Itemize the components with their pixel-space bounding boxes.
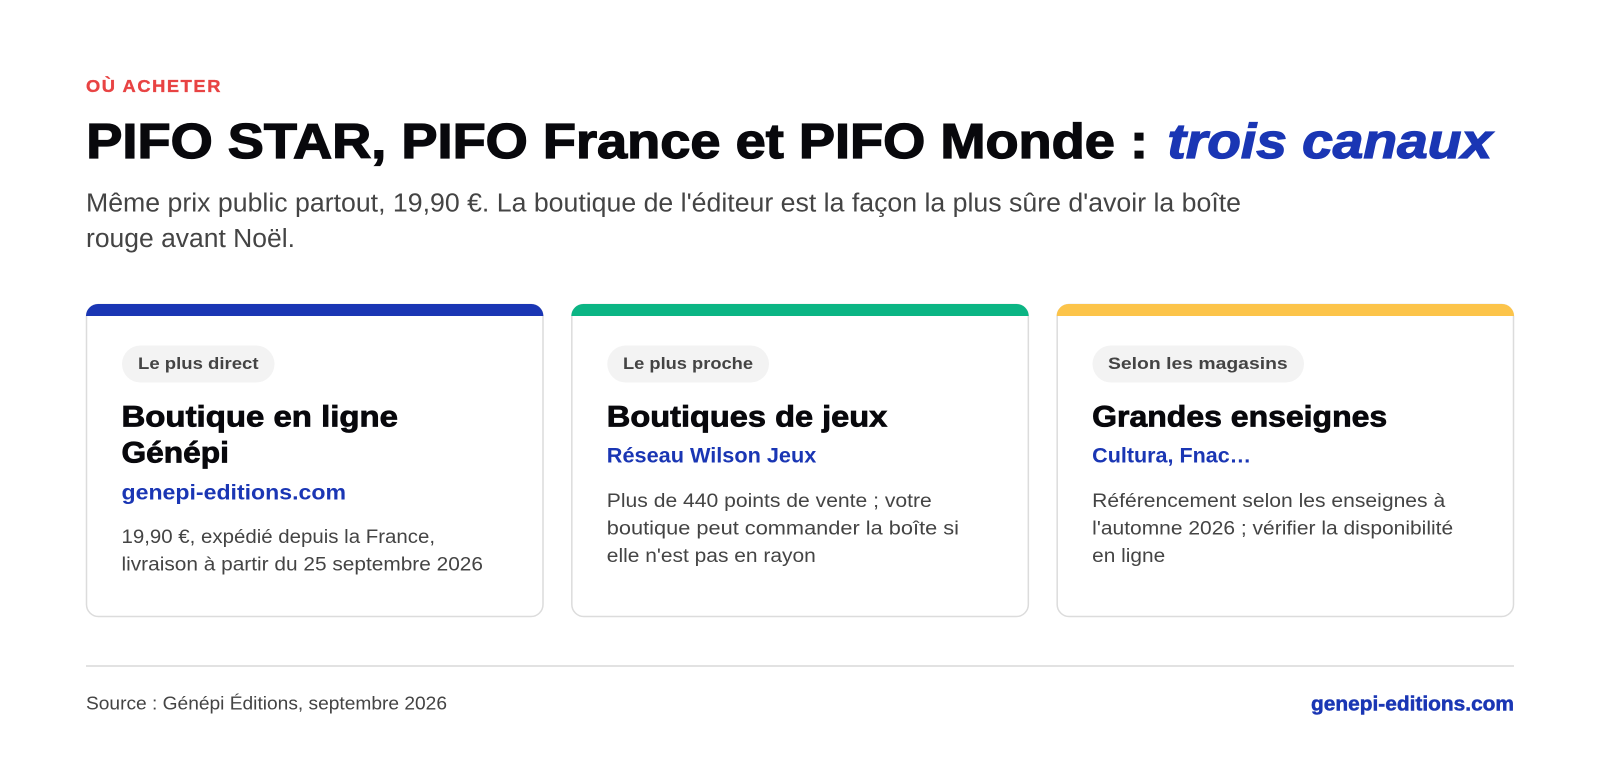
card heading: Boutique en ligne (122, 400, 398, 434)
card description: livraison à partir du 25 septembre 2026 (122, 555, 483, 576)
panel: boutique en ligne (86, 304, 543, 616)
card description (1092, 491, 1453, 567)
subtitle: Même prix public partout, 19,90 €. La boutique de l'éditeur est la façon la plus sûre d'avoir la boîte (86, 190, 1241, 218)
panel: grandes enseignes (1057, 304, 1514, 616)
card frame (1057, 304, 1514, 616)
title: PIFO STAR, PIFO France et PIFO Monde : (86, 115, 1148, 169)
card heading: Grandes enseignes (1092, 400, 1387, 434)
card link: genepi-editions.com (122, 482, 346, 504)
card description (607, 491, 959, 567)
tag pill (1092, 346, 1304, 382)
title: trois canaux (1168, 115, 1494, 169)
card frame (572, 304, 1028, 616)
source note: Source : Génépi Éditions, septembre 2026 (86, 694, 447, 714)
card description: en ligne (1092, 546, 1165, 567)
card heading (122, 400, 398, 470)
card link: Cultura, Fnac… (1092, 445, 1251, 468)
tag pill (122, 346, 274, 382)
panel: boutiques de jeux (571, 304, 1029, 616)
card description: elle n'est pas en rayon (607, 546, 816, 567)
tag pill (607, 346, 769, 382)
subtitle: rouge avant Noël. (86, 225, 295, 253)
tag pill: Selon les magasins (1108, 354, 1288, 373)
tag pill: Le plus direct (138, 354, 259, 373)
accent bar (86, 304, 543, 316)
footer link: genepi-editions.com (1311, 694, 1514, 716)
card description: 19,90 €, expédié depuis la France, (122, 527, 435, 548)
card description: l'automne 2026 ; vérifier la disponibilité (1092, 519, 1453, 540)
card description: Référencement selon les enseignes à (1092, 491, 1446, 512)
card description (122, 527, 483, 576)
card link: Réseau Wilson Jeux (607, 445, 817, 468)
accent bar (1057, 304, 1514, 316)
card description: boutique peut commander la boîte si (607, 519, 959, 540)
eyebrow label: OÙ ACHETER (86, 75, 222, 96)
title (86, 115, 1494, 169)
subtitle (86, 190, 1241, 253)
card frame (86, 304, 543, 616)
card heading: Génépi (122, 436, 229, 470)
accent bar (571, 304, 1029, 316)
card heading: Boutiques de jeux (607, 400, 888, 434)
card description: Plus de 440 points de vente ; votre (607, 491, 932, 512)
tag pill: Le plus proche (623, 354, 753, 373)
